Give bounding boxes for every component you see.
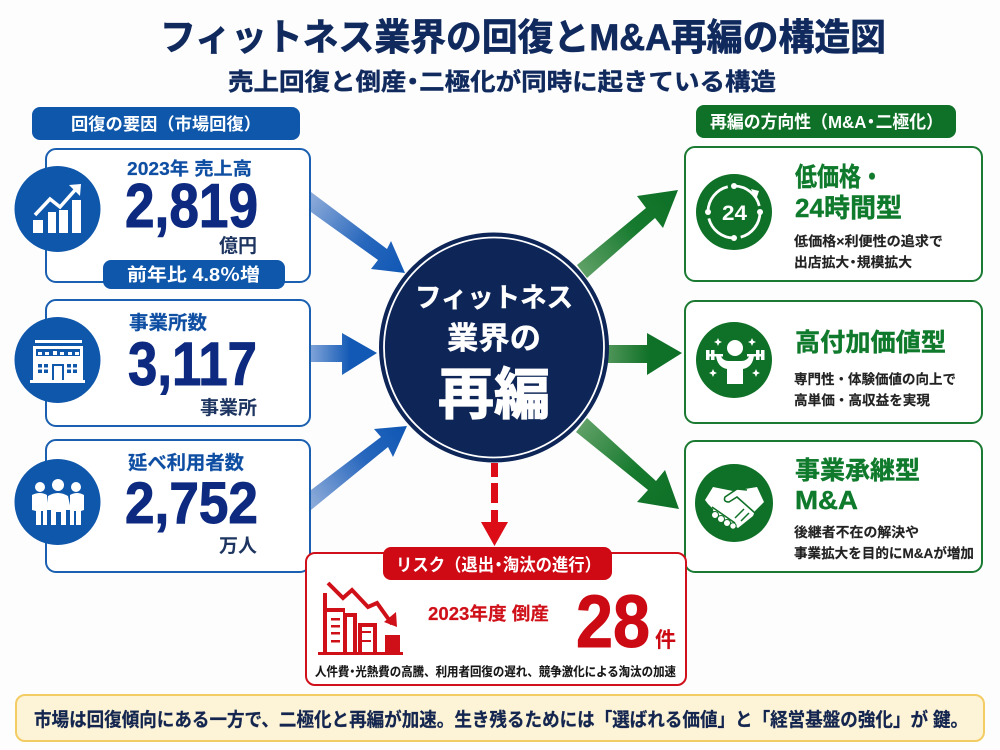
heading: risk: リスク（退出・淘汰の進行） [396,555,601,575]
label: 2023 sales: 2023年 売上高 [127,158,252,179]
value: 2819: 2,819 [125,172,258,241]
panel: direction heading: 再編の方向性（M&A・二極化） [710,112,943,132]
heading: high value: 高付加価値型 [795,329,946,357]
arrow: sales to center [311,192,405,273]
unit: facilities: 事業所 [200,397,257,419]
icon: rising chart [14,166,100,252]
panel: low price card: 出店拡大・規模拡大 [794,254,913,270]
callout: conclusion banner [16,695,984,741]
label: 2023 bankruptcies: 2023年度 倒産 [428,603,549,624]
icon: person with dumbbells [696,322,772,398]
value: 2752: 2,752 [125,471,258,536]
label: facilities: 事業所数 [129,312,207,334]
description: low price: 低価格×利便性の追求で [794,233,943,249]
panel: direction heading [696,105,956,138]
unit: oku yen: 億円 [219,235,257,257]
value: 3117: 3,117 [128,330,257,398]
description: high value: 専門性・体験価値の向上で [794,371,956,387]
label: users: 延べ利用者数 [128,452,244,474]
panel: succession card: M&A [795,485,858,515]
heading: low price: 低価格・ [795,162,883,192]
panel: high value card [685,301,982,423]
panel: users card [14,440,310,572]
arrow: users to center [311,426,407,510]
badge: year on year: 前年比 4.8％増 [127,264,260,285]
badge: year on year [103,260,285,289]
icon: 24 hour: 24 [722,202,747,225]
panel: recovery factors heading [32,107,300,140]
icon: handshake [695,464,773,542]
center circle: 業界の [447,321,541,356]
arrow: center to risk [481,463,508,546]
panel: low price card: 24時間型 [795,193,902,223]
center circle: フィットネス [415,283,573,313]
value: 28: 28 [576,580,650,663]
title: フィットネス業界の回復とM&A再編の構造図 [160,17,886,58]
panel: risk [306,547,686,685]
center circle [379,232,609,462]
icon: people [14,459,100,545]
unit: ten thousand people: 万人 [219,536,257,557]
panel: succession card [685,441,982,572]
panel: recovery factors heading: 回復の要因（市場回復） [71,114,261,134]
heading: succession: 事業承継型 [795,457,920,485]
icon: storefront [14,317,100,403]
arrow: facilities to center [311,333,377,375]
panel: succession card: 事業拡大を目的にM&Aが増加 [794,545,974,561]
arrow: center to high value [608,333,682,375]
panel: high value card: 高単価・高収益を実現 [794,392,931,408]
icon: 24 hour [696,174,772,250]
arrow: center to low price [577,190,678,278]
subtitle: 売上回復と倒産・二極化が同時に起きている構造 [228,68,776,96]
arrow: center to succession [576,418,679,509]
description: succession: 後継者不在の解決や [794,524,919,540]
unit: cases: 件 [655,629,676,652]
panel: sales card [14,149,310,289]
icon: declining buildings [318,583,403,655]
heading: risk [383,547,612,580]
panel: facilities card [14,300,310,426]
description: risk factors: 人件費・光熱費の高騰、利用者回復の遅れ、競争激化による淘汰の加速 [315,664,676,679]
panel: low price card [685,147,982,281]
center circle: 再編 [438,363,550,426]
